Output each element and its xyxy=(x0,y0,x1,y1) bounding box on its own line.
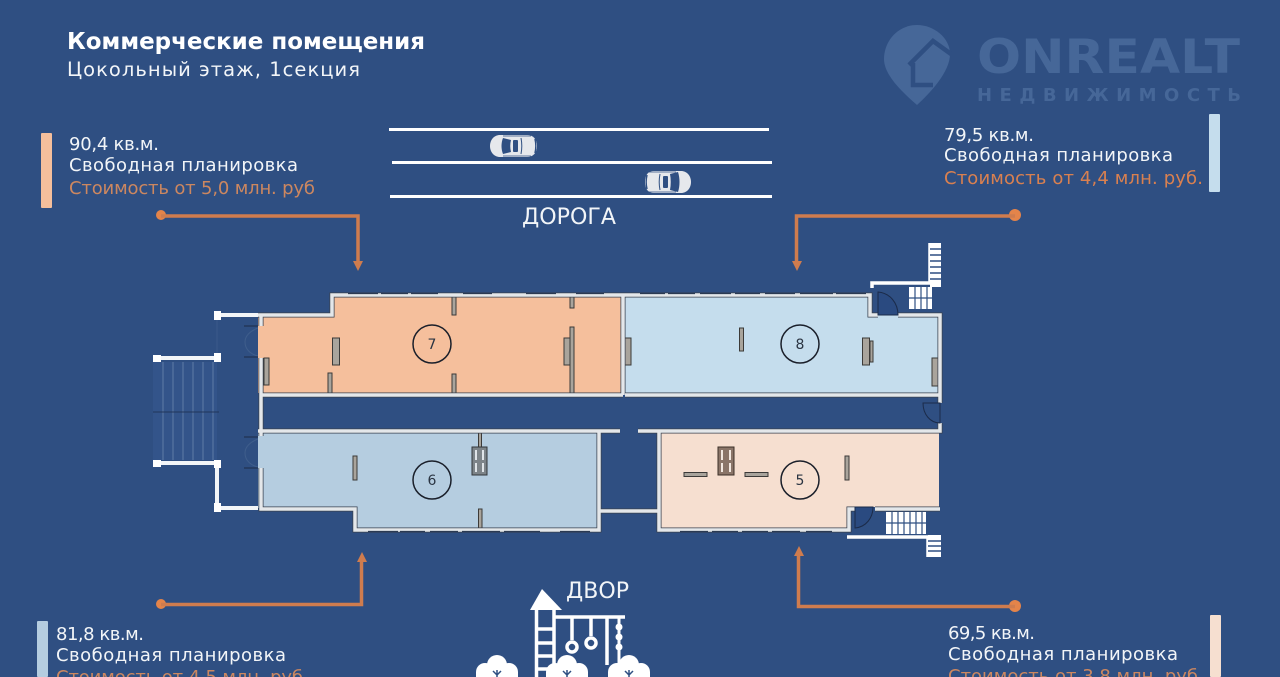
icon: location pin with house xyxy=(884,25,951,105)
room 7: 7 xyxy=(428,337,436,353)
info block: room 6: 81,8 кв.м. xyxy=(56,624,144,645)
icon: playground with trees xyxy=(476,589,650,677)
info block: room 5: Свободная планировка xyxy=(948,644,1178,665)
info block: room 6: Свободная планировка xyxy=(56,645,286,666)
info block: room 8 xyxy=(944,114,1220,192)
logo watermark: ONREALT: НЕДВИЖИМОСТЬ xyxy=(977,85,1241,106)
room 5 xyxy=(661,433,939,528)
arrow: room 7 connector xyxy=(156,210,363,271)
icon: tree left xyxy=(476,655,518,677)
stairs and door: upper right xyxy=(872,243,941,315)
room 7 xyxy=(258,296,622,395)
room 6 xyxy=(258,429,597,529)
info block: room 7: 90,4 кв.м. xyxy=(69,134,159,155)
logo watermark: ONREALT: ONREALT xyxy=(977,30,1240,85)
icon: car 1 xyxy=(490,135,537,157)
icon: tree right xyxy=(608,655,650,677)
info block: room 8: 79,5 кв.м. xyxy=(944,125,1034,146)
info block: room 7: Стоимость от 5,0 млн. руб xyxy=(69,178,315,199)
road label: ДОРОГА xyxy=(522,205,616,230)
entrance stairs and porch xyxy=(153,311,258,512)
subtitle: Цокольный этаж, 1секция xyxy=(67,58,360,81)
stairs and door: lower right xyxy=(847,507,941,557)
logo watermark: ONREALT xyxy=(884,25,1241,106)
floor plan xyxy=(153,243,941,557)
icon: tree centre xyxy=(546,655,588,677)
info block: room 7 xyxy=(41,133,315,208)
room 6: 6 xyxy=(428,473,437,489)
arrow: room 5 connector xyxy=(794,546,1021,612)
yard label: ДВОР xyxy=(566,579,629,604)
arrow: room 6 connector xyxy=(156,552,367,609)
icon: car 2 xyxy=(645,171,691,193)
walls xyxy=(258,294,940,532)
info block: room 8: Стоимость от 4,4 млн. руб. xyxy=(944,168,1203,189)
room 8 xyxy=(625,297,939,393)
title: Коммерческие помещения xyxy=(67,29,425,55)
road xyxy=(389,130,772,230)
info block: room 6 xyxy=(37,621,303,677)
info block: room 5 xyxy=(948,615,1221,677)
room 5: 5 xyxy=(796,473,804,489)
info block: room 5: 69,5 кв.м. xyxy=(948,623,1035,644)
info block: room 8: Свободная планировка xyxy=(944,145,1173,166)
door: right corridor xyxy=(923,403,940,423)
info block: room 7: Свободная планировка xyxy=(69,155,298,176)
arrow: room 8 connector xyxy=(792,209,1021,271)
room 8: 8 xyxy=(796,337,804,353)
